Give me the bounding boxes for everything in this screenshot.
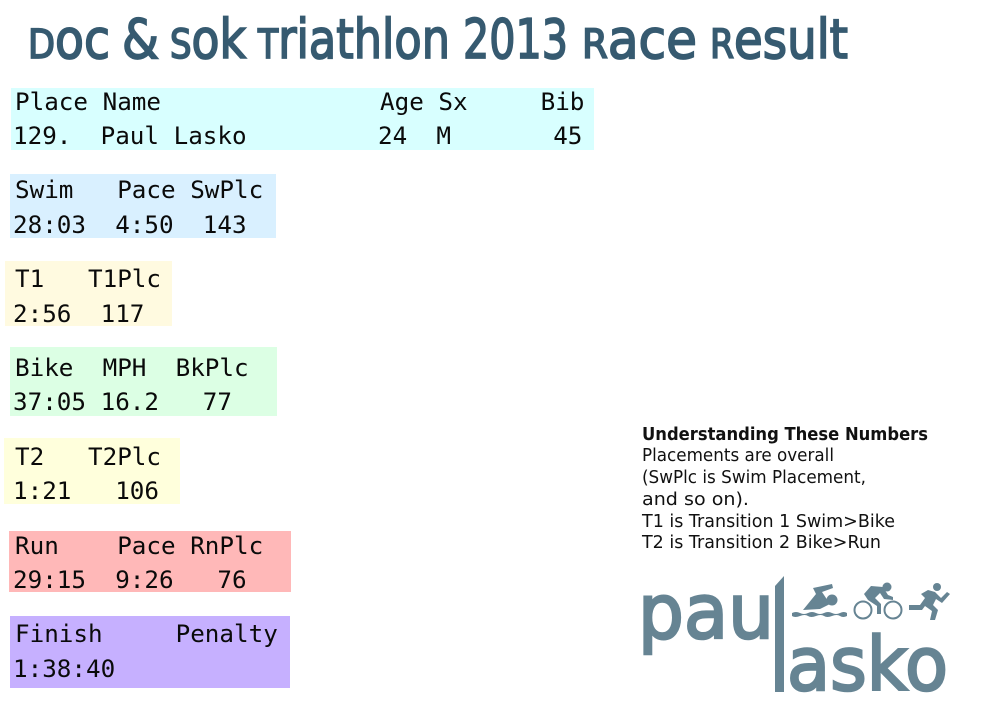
panel: athlete	[11, 88, 594, 150]
text block: understanding these numbers	[641, 425, 928, 553]
panel: bike	[10, 347, 277, 416]
icon: swimmer	[792, 584, 847, 617]
swim header row: Swim Pace SwPlc	[15, 175, 263, 204]
text block: understanding these numbers: (SwPlc is Swim Placement,	[642, 468, 866, 488]
athlete header row: Place Name Age Sx Bib	[15, 87, 584, 116]
icon: runner	[909, 583, 950, 620]
title: Result	[710, 8, 848, 71]
T1 values row: 2:56 117	[13, 299, 144, 328]
panel: transition 1	[5, 261, 172, 326]
panel: transition 2	[4, 438, 180, 504]
text block: understanding these numbers: and so on).	[642, 490, 749, 510]
athlete values row: 129. Paul Lasko 24 M 45	[13, 121, 582, 150]
text block: understanding these numbers: T2 is Transition 2 Bike>Run	[641, 533, 881, 553]
title: Race	[582, 8, 697, 71]
icon: cyclist	[854, 582, 902, 618]
bike values row: 37:05 16.2 77	[13, 387, 232, 416]
title: Triathlon	[257, 8, 450, 71]
swim values row: 28:03 4:50 143	[13, 210, 247, 239]
panel: swim	[10, 174, 276, 238]
T2 header row: T2 T2Plc	[15, 442, 161, 471]
panel: finish	[10, 616, 290, 688]
logo: paul lasko	[638, 570, 950, 700]
run header row: Run Pace RnPlc	[15, 531, 263, 560]
T1 header row: T1 T1Plc	[15, 264, 161, 293]
title: Sok	[170, 8, 247, 71]
logo tall l	[775, 576, 784, 692]
text block: understanding these numbers: T1 is Transition 1 Swim>Bike	[641, 512, 895, 532]
text block: understanding these numbers: Placements are overall	[642, 446, 834, 466]
title: 2013	[463, 8, 568, 71]
finish values row: 1:38:40	[13, 654, 115, 683]
title: Doc	[28, 8, 110, 71]
T2 values row: 1:21 106	[13, 476, 159, 505]
bike header row: Bike MPH BkPlc	[15, 353, 249, 382]
panel: run	[9, 531, 291, 592]
title: &	[122, 8, 159, 71]
title	[28, 8, 848, 71]
finish header row: Finish Penalty	[15, 619, 278, 648]
run values row: 29:15 9:26 76	[13, 565, 247, 594]
